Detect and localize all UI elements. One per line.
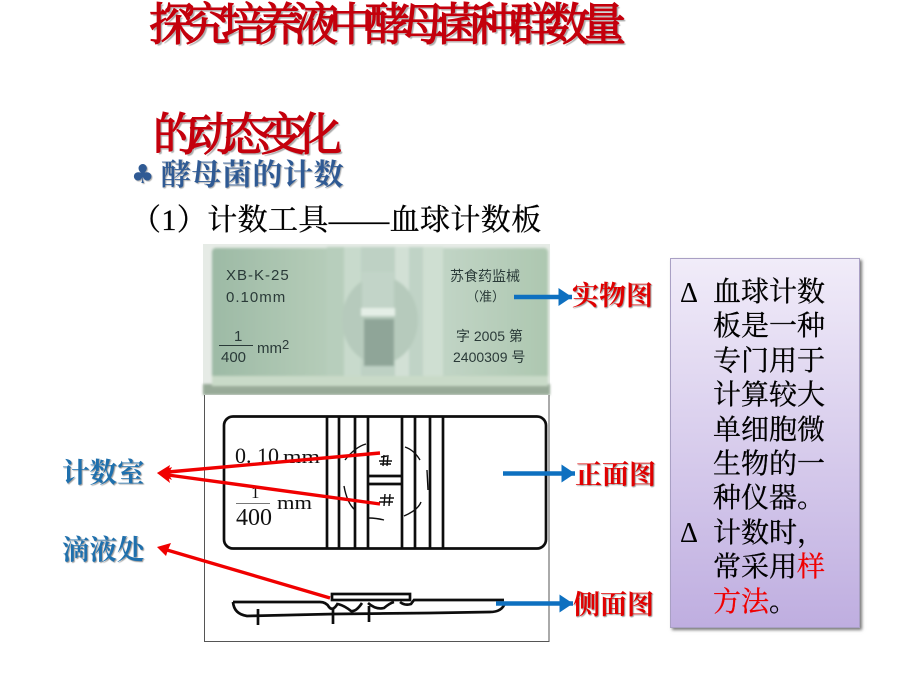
photo: haemocytometer: 苏食药监械 (450, 268, 520, 284)
photo: haemocytometer: 0.10mm (226, 289, 286, 306)
diagram: front and side views: mm (283, 447, 320, 468)
arrow: to front view label (503, 471, 575, 476)
diagram: front and side views: 400 (236, 505, 272, 531)
label: counting chamber: 计数室 (62, 457, 144, 488)
arrow: drop point pointer (157, 543, 330, 598)
paragraph one: 板是一种 (713, 311, 825, 342)
paragraph two: 常采用样 (713, 552, 825, 583)
paragraph one: 单细胞微 (713, 415, 825, 446)
diagram: front and side views: 1 (251, 483, 260, 502)
arrow: to side view label (496, 601, 573, 606)
title (149, 0, 626, 160)
diagram: front and side views: 0. 10 (235, 443, 279, 468)
photo: haemocytometer: 2 (282, 337, 289, 352)
diagram: front and side views: mm (277, 493, 312, 514)
label: drop point: 滴液处 (62, 534, 144, 565)
bullet one: Δ (680, 278, 698, 309)
heading: yeast counting: 酵母菌的计数 (161, 159, 344, 192)
photo: haemocytometer: XB-K-25 (226, 267, 290, 284)
title: 的动态变化 (153, 110, 333, 160)
label: front view: 正面图 (575, 460, 656, 490)
subheading: counting tool: （1）计数工具——血球计数板 (131, 204, 542, 237)
paragraph one: 生物的一 (713, 449, 825, 480)
arrows: counting chamber pointers (157, 453, 380, 504)
paragraph two (713, 518, 825, 618)
panel: description (670, 258, 860, 628)
bullet two: Δ (680, 518, 698, 549)
paragraph one: 血球计数 (713, 277, 825, 308)
photo: haemocytometer: 字 2005 第 (456, 328, 523, 344)
diagram: front and side views (204, 395, 549, 642)
label: side view: 侧面图 (573, 590, 654, 620)
photo: haemocytometer: 2400309 号 (453, 349, 525, 365)
heading: yeast counting: ♣ (131, 160, 154, 190)
photo: haemocytometer: 1 (234, 328, 242, 345)
paragraph one: 种仪器。 (713, 483, 825, 514)
photo: haemocytometer: （准） (466, 289, 505, 304)
photo: haemocytometer (203, 244, 550, 395)
paragraph one: 计算较大 (713, 380, 825, 411)
paragraph two: 方法。 (713, 587, 797, 618)
label: photo view: 实物图 (572, 281, 653, 311)
arrow: to photo label (514, 295, 572, 299)
title: 探究培养液中酵母菌种群数量 (149, 0, 617, 50)
paragraph two: 计数时， (713, 518, 825, 549)
photo: haemocytometer: mm (257, 340, 282, 357)
paragraph one (713, 277, 825, 514)
paragraph one: 专门用于 (713, 346, 825, 377)
photo: haemocytometer: 400 (221, 349, 246, 366)
